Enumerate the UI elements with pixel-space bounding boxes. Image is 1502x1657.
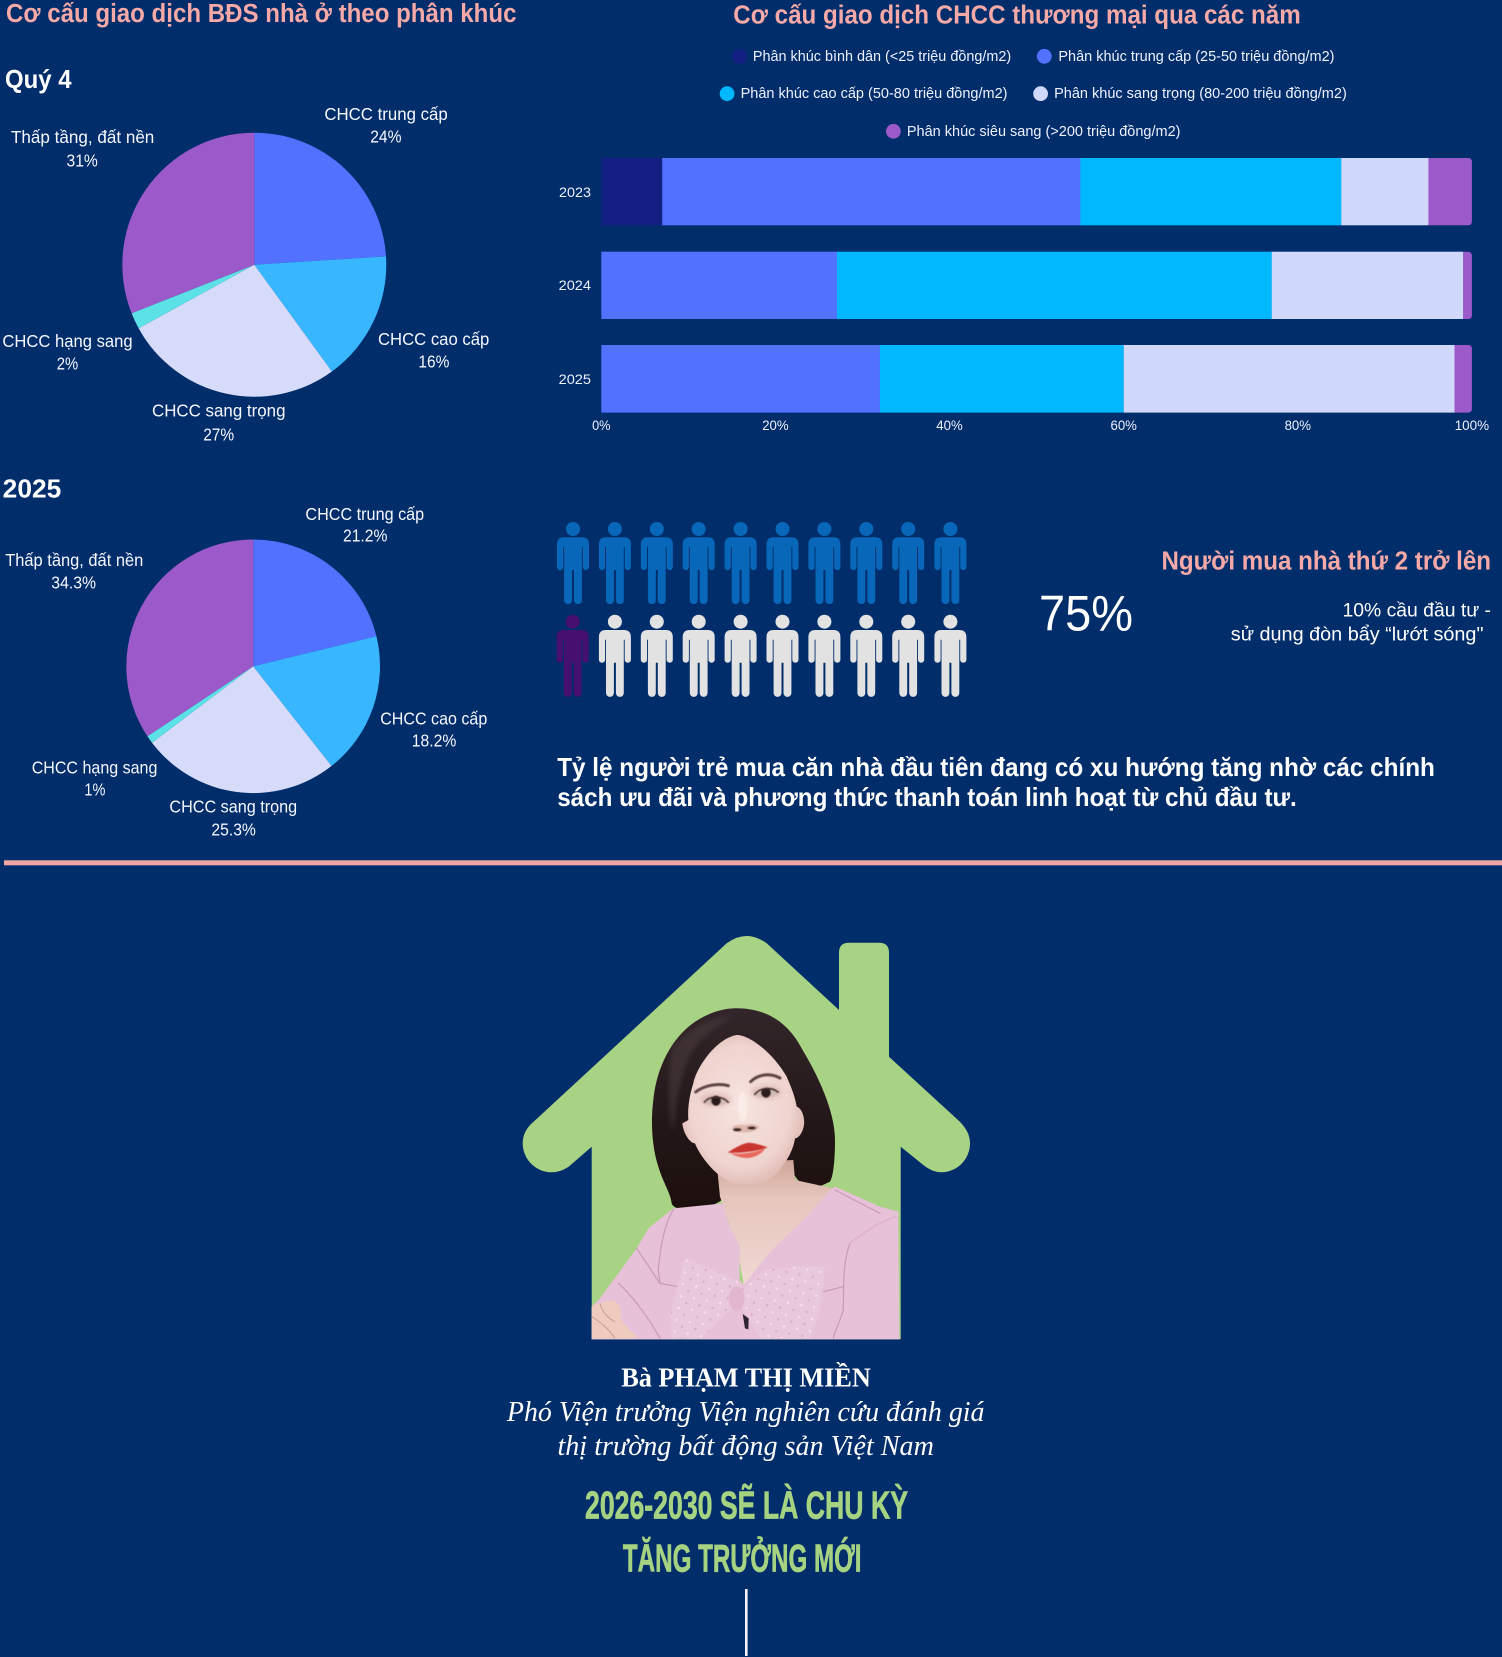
legend item: sang trọng: Phân khúc sang trọng (80-200 triệu đồng/m2) — [1054, 86, 1347, 102]
hair highlights — [669, 1017, 733, 1133]
name: Bà PHẠM THỊ MIỀN: Bà PHẠM THỊ MIỀN — [621, 1362, 871, 1393]
label: CHCC sang trọng 25.3%: CHCC sang trọng — [169, 797, 297, 817]
label: Thấp tầng, đất nền 34.3%: Thấp tầng, đất nền — [5, 550, 143, 570]
hand — [592, 1300, 638, 1338]
year labels: 2024 — [559, 277, 591, 293]
legend item: cao cấp: Phân khúc cao cấp (50-80 triệu đồng/m2) — [741, 86, 1008, 102]
label: CHCC cao cấp 18.2% — [380, 709, 487, 751]
nose — [732, 1092, 759, 1132]
label: CHCC cao cấp 18.2%: 18.2% — [412, 731, 456, 751]
label: Thấp tầng, đất nền 34.3%: 34.3% — [51, 573, 96, 593]
label: CHCC hạng sang 2%: 2% — [57, 354, 78, 374]
label: CHCC sang trọng 25.3%: 25.3% — [211, 819, 256, 839]
label: Thấp tầng, đất nền 31% — [11, 127, 154, 171]
axis labels: 0% — [592, 417, 610, 433]
heading: right chart title: Cơ cấu giao dịch CHCC thương mại qua các năm — [733, 1, 1301, 29]
eye sockets — [701, 1085, 781, 1107]
text block: young buyers: sách ưu đãi và phương thức thanh toán linh hoạt từ chủ đầu tư. — [557, 782, 1297, 812]
label: CHCC trung cấp 24%: CHCC trung cấp — [324, 104, 448, 124]
label: CHCC hạng sang 1% — [32, 758, 157, 799]
portrait: woman in pink blouse — [592, 1008, 899, 1339]
headline: 2026-2030: TĂNG TRƯỞNG MỚI — [623, 1537, 862, 1581]
label: CHCC hạng sang 1%: 1% — [84, 779, 105, 799]
label: CHCC hạng sang 2% — [2, 331, 133, 374]
label: CHCC trung cấp 21.2%: CHCC trung cấp — [305, 504, 424, 524]
label: CHCC cao cấp 16% — [378, 329, 489, 372]
divider — [4, 860, 1502, 865]
label: CHCC sang trọng 27%: 27% — [203, 425, 234, 445]
stat: 75%: 75% — [1039, 586, 1133, 642]
role text: Phó Viện trưởng Viện nghiên cứu đánh giá — [506, 1397, 984, 1428]
heading: 2025: 2025 — [3, 474, 61, 504]
bar chart: stacked bars by year — [559, 158, 1489, 433]
pie chart: 2025 — [126, 540, 380, 793]
role text — [506, 1397, 984, 1462]
eyes — [704, 1088, 779, 1106]
bar: 2025 — [601, 345, 1472, 413]
headline: 2026-2030: 2026-2030 SẼ LÀ CHU KỲ — [585, 1483, 908, 1527]
icon: green house — [523, 936, 970, 1339]
legend item: trung cấp: Phân khúc trung cấp (25-50 triệu đồng/m2) — [1058, 49, 1334, 65]
pie chart: Quý 4 — [122, 133, 386, 397]
label: CHCC sang trọng 27% — [152, 401, 286, 445]
label: CHCC trung cấp 21.2%: 21.2% — [343, 526, 387, 546]
year labels: 2025 — [559, 371, 591, 387]
bar: 2024 — [601, 252, 1472, 319]
text block: cầu đầu tư — [1231, 601, 1491, 646]
bow — [670, 1258, 825, 1338]
text block: cầu đầu tư: sử dụng đòn bẩy “lướt sóng" — [1231, 625, 1484, 646]
text block: cầu đầu tư: 10% cầu đầu tư - — [1342, 601, 1491, 622]
label: CHCC cao cấp 16%: CHCC cao cấp — [378, 329, 489, 349]
year labels — [559, 184, 591, 387]
legend — [720, 49, 1347, 140]
heading: left chart title: Cơ cấu giao dịch BĐS nhà ở theo phân khúc — [6, 0, 516, 28]
bar: 2023 — [601, 158, 1472, 225]
lips — [728, 1143, 768, 1158]
axis labels — [592, 417, 1489, 433]
headline: 2026-2030 — [585, 1483, 908, 1581]
heading: Người mua nhà thứ 2 trở lên: Người mua nhà thứ 2 trở lên — [1162, 547, 1491, 575]
connector line — [745, 1589, 748, 1656]
row: blue people — [557, 522, 966, 604]
label: CHCC hạng sang 2%: CHCC hạng sang — [2, 331, 133, 351]
eyebrows — [696, 1075, 780, 1092]
axis labels: 100% — [1455, 417, 1489, 433]
label: CHCC trung cấp 24% — [324, 104, 448, 146]
year labels: 2023 — [559, 184, 591, 200]
axis labels: 40% — [936, 417, 963, 433]
label: CHCC hạng sang 1%: CHCC hạng sang — [32, 758, 157, 778]
label: CHCC trung cấp 21.2% — [305, 504, 424, 546]
pictogram: 20 people — [557, 522, 966, 697]
role text: thị trường bất động sản Việt Nam — [558, 1431, 934, 1462]
label: Thấp tầng, đất nền 31%: 31% — [66, 151, 98, 171]
heading: Quý 4: Quý 4 — [5, 64, 72, 94]
neck — [717, 1160, 833, 1287]
axis labels: 60% — [1110, 417, 1137, 433]
label: CHCC sang trọng 27%: CHCC sang trọng — [152, 401, 286, 421]
label: Thấp tầng, đất nền 31%: Thấp tầng, đất nền — [11, 127, 154, 147]
blouse seams — [618, 1190, 897, 1338]
text block: young buyers — [557, 752, 1435, 812]
fingers line — [592, 1303, 615, 1338]
axis labels: 20% — [762, 417, 789, 433]
row: light people — [599, 615, 966, 697]
legend item: bình dân: Phân khúc bình dân (<25 triệu đồng/m2) — [753, 49, 1011, 65]
blouse — [592, 1187, 899, 1339]
person: purple — [557, 615, 589, 697]
label: CHCC sang trọng 25.3% — [169, 797, 297, 839]
label: CHCC cao cấp 18.2%: CHCC cao cấp — [380, 709, 487, 729]
label: CHCC trung cấp 24%: 24% — [370, 126, 402, 146]
text block: young buyers: Tỷ lệ người trẻ mua căn nhà đầu tiên đang có xu hướng tăng nhờ các chính — [557, 752, 1435, 782]
axis labels: 80% — [1285, 417, 1311, 433]
hair — [652, 1008, 835, 1210]
label: Thấp tầng, đất nền 34.3% — [5, 550, 143, 593]
label: CHCC cao cấp 16%: 16% — [418, 352, 449, 372]
face — [682, 1035, 804, 1184]
legend item: siêu sang: Phân khúc siêu sang (>200 triệu đồng/m2) — [907, 124, 1180, 140]
